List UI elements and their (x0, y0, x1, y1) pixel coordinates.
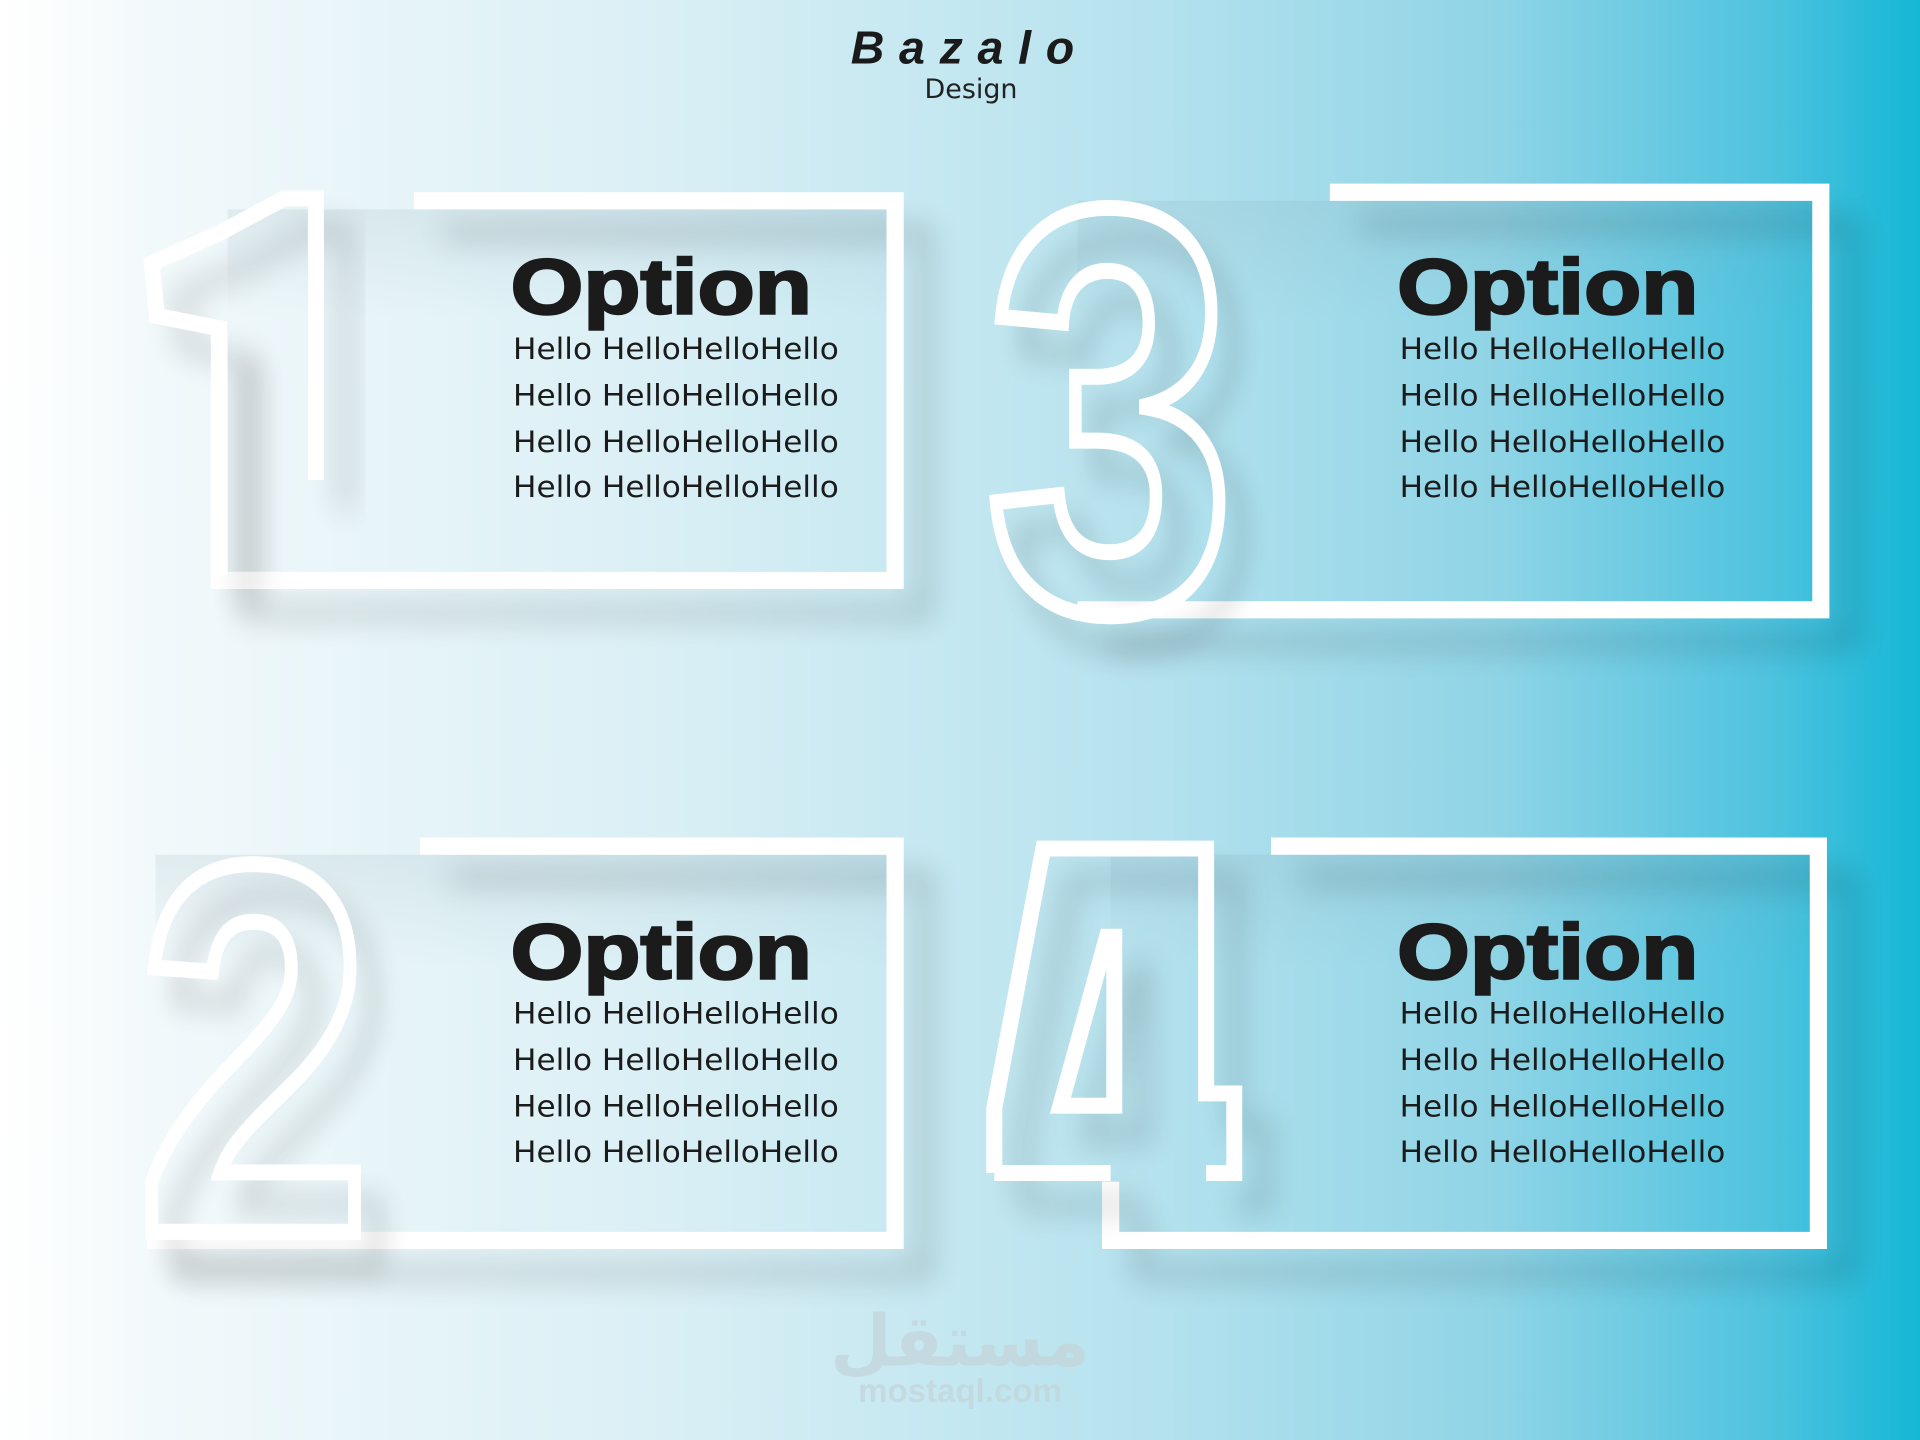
panel: option 3: Hello HelloHelloHello (1400, 425, 1725, 459)
panel: option 3: Hello HelloHelloHello (1400, 470, 1725, 504)
panel: option 2: Option (511, 907, 812, 995)
panel: option 3: Option (1397, 242, 1698, 330)
number 4 (994, 849, 1234, 1173)
watermark: mostaql.com (858, 1373, 1062, 1410)
panel: option 2: Hello HelloHelloHello (513, 1135, 839, 1169)
panel: option 4: Option (1397, 907, 1698, 995)
panel: option 2: Hello HelloHelloHello (513, 1090, 839, 1124)
panel: option 4: Hello HelloHelloHello (1400, 1135, 1725, 1169)
panel: option 2: Hello HelloHelloHello (513, 1043, 839, 1077)
panel: option 1: Hello HelloHelloHello (513, 332, 839, 366)
title: Design (925, 74, 1017, 105)
panel: option 3: Hello HelloHelloHello (1400, 332, 1725, 366)
watermark: مستقل (830, 1302, 1090, 1381)
panel: option 1 (152, 198, 895, 580)
panel: option 3: Hello HelloHelloHello (1400, 378, 1725, 412)
panel: option 4: Hello HelloHelloHello (1400, 997, 1725, 1031)
panel: option 3 (986, 90, 1821, 732)
title (851, 22, 1089, 105)
panel: option 2 (137, 756, 895, 1344)
number 1 (152, 198, 316, 576)
title: Bazalo (851, 22, 1089, 74)
panel: option 4: Hello HelloHelloHello (1400, 1043, 1725, 1077)
panel: option 4 (994, 846, 1818, 1240)
number 3: 3 (986, 90, 1235, 732)
panel: option 1: Hello HelloHelloHello (513, 470, 839, 504)
panel: option 1: Hello HelloHelloHello (513, 425, 839, 459)
panel: option 4: Hello HelloHelloHello (1400, 1090, 1725, 1124)
panel: option 1: Option (511, 242, 812, 330)
number 2: 2 (137, 756, 371, 1344)
panel: option 2: Hello HelloHelloHello (513, 997, 839, 1031)
panel: option 1: Hello HelloHelloHello (513, 378, 839, 412)
